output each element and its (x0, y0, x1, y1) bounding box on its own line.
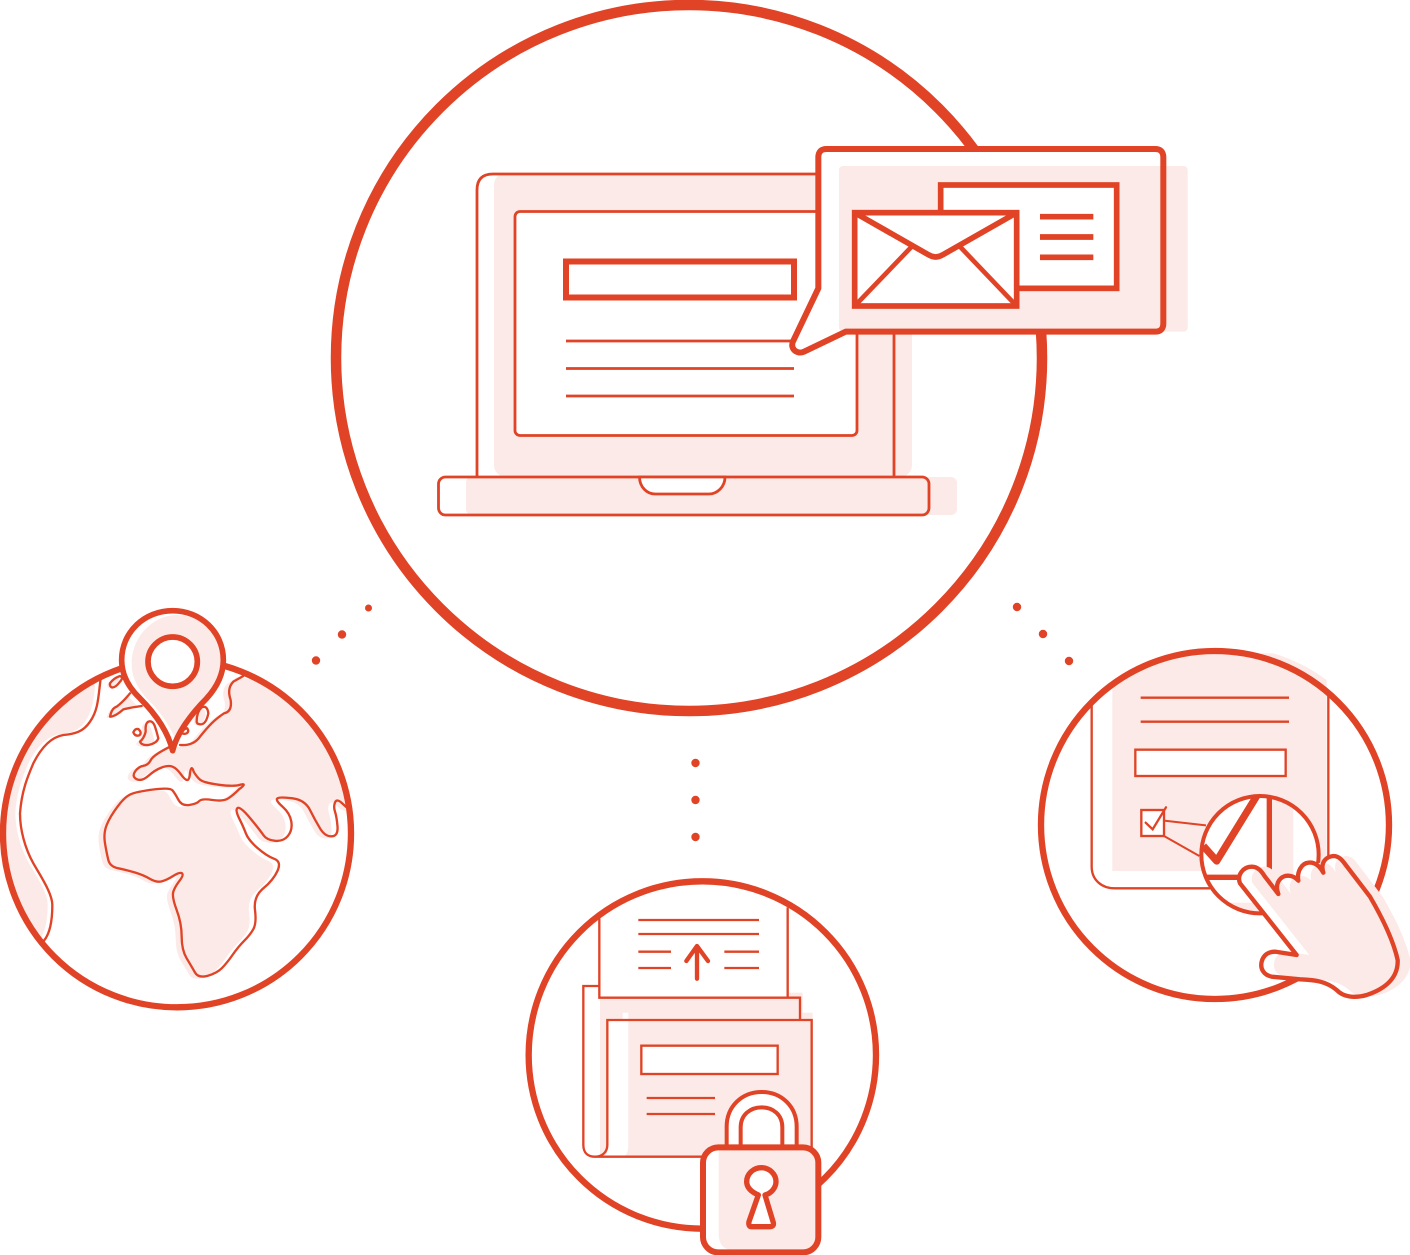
letter behind envelope (941, 185, 1117, 288)
form field (641, 1046, 778, 1074)
connector dots: document (691, 759, 700, 841)
location pin (122, 611, 223, 751)
document pale fill (1112, 653, 1327, 871)
keyhole (747, 1168, 776, 1227)
magnifier (1197, 790, 1319, 919)
connector dots: globe (312, 604, 372, 665)
pointing hand (1239, 856, 1410, 997)
top page lines (638, 920, 759, 968)
form field (1135, 750, 1286, 776)
text lines (647, 1098, 715, 1114)
land fills (0, 649, 377, 979)
panel: secure document with padlock (529, 881, 876, 1252)
document outline (1092, 695, 1328, 888)
checkbox (1141, 807, 1166, 836)
screen title field (566, 262, 794, 298)
panel: form with magnifier and pointing hand (1041, 651, 1410, 999)
land outlines (20, 676, 347, 977)
magnifier callout lines (1164, 821, 1206, 856)
large circle (336, 5, 1042, 711)
circle (1041, 651, 1389, 999)
screen text lines (566, 341, 800, 396)
envelope (855, 213, 1017, 306)
padlock (703, 1092, 818, 1252)
panel: globe with location pin (0, 611, 377, 1007)
laptop (438, 173, 957, 515)
email speech bubble (792, 149, 1188, 353)
document pale fills (600, 993, 813, 1157)
panel: laptop with email in large circle (336, 5, 1188, 711)
document outlines (583, 907, 812, 1157)
text lines (1141, 698, 1289, 722)
upload arrow (686, 946, 708, 979)
connector dots: form (1013, 603, 1073, 665)
globe circle (3, 659, 351, 1007)
circle (529, 881, 876, 1229)
